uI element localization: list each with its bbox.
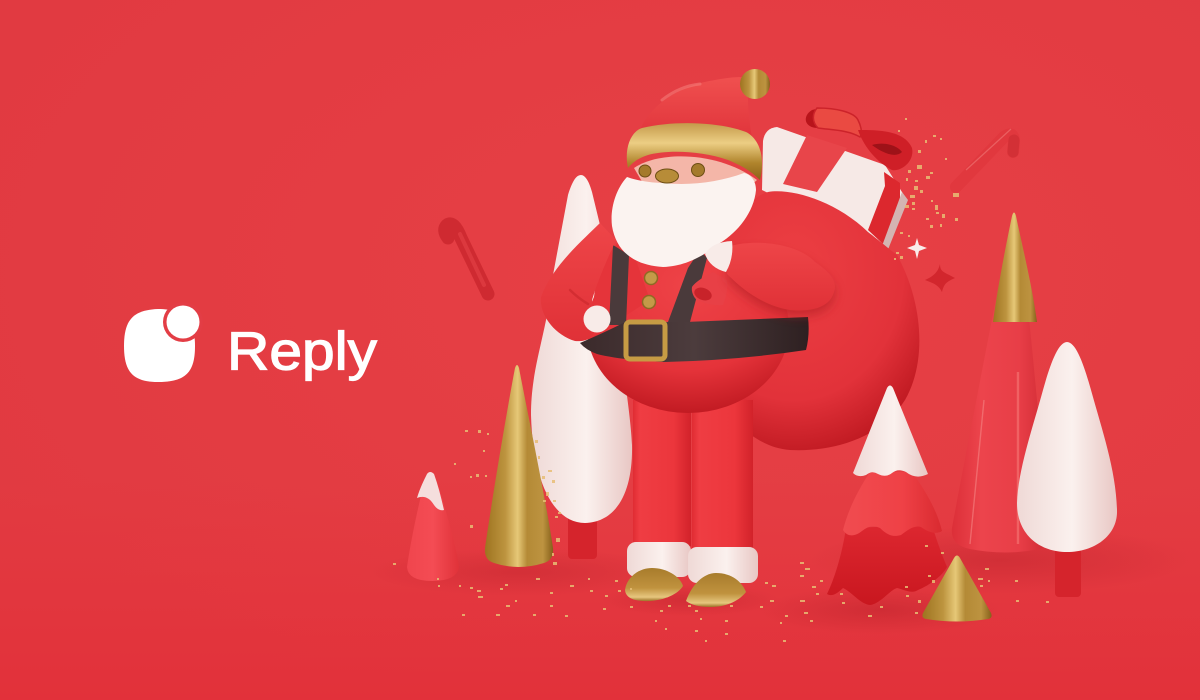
sparkles: gold flecks xyxy=(393,118,1049,642)
santa xyxy=(541,69,835,607)
face skin xyxy=(634,156,757,195)
bottom tier xyxy=(827,525,947,605)
bell xyxy=(692,272,727,305)
left hand xyxy=(584,306,610,332)
star: red xyxy=(925,264,955,292)
tree: small red white-tipped cone xyxy=(407,472,459,581)
logo: Reply xyxy=(124,302,377,382)
gold band xyxy=(627,123,762,180)
box body xyxy=(762,127,907,250)
tree: small gold cone xyxy=(922,556,992,622)
boots xyxy=(625,568,746,607)
tree: layered red with white top xyxy=(827,386,947,605)
white top xyxy=(853,386,928,477)
icon: speech blob with dot xyxy=(124,302,203,382)
right side band xyxy=(868,172,900,244)
star: white sparkle xyxy=(907,238,927,259)
body xyxy=(587,232,789,413)
tree: tall red and gold cone xyxy=(952,212,1048,552)
gift box xyxy=(762,108,912,252)
middle tier xyxy=(843,472,942,536)
buttons xyxy=(642,272,658,308)
boot cuffs xyxy=(627,542,758,583)
candy cane right xyxy=(956,129,1014,187)
wordmark: Reply xyxy=(227,322,377,382)
belt xyxy=(580,317,809,362)
face details xyxy=(639,164,704,183)
tree: gold cone xyxy=(485,365,553,567)
tree: white right xyxy=(1017,342,1117,597)
left arm xyxy=(541,223,616,341)
hat xyxy=(627,69,770,180)
right hand xyxy=(705,241,732,272)
sack xyxy=(702,191,919,450)
right arm xyxy=(705,241,835,316)
red band xyxy=(783,135,847,192)
legs xyxy=(633,400,753,552)
buckle xyxy=(626,322,665,359)
beard xyxy=(612,173,756,267)
straps xyxy=(609,245,707,325)
candy cane left xyxy=(445,224,488,294)
tree: white behind santa xyxy=(531,175,632,559)
ribbon bow xyxy=(806,108,912,170)
